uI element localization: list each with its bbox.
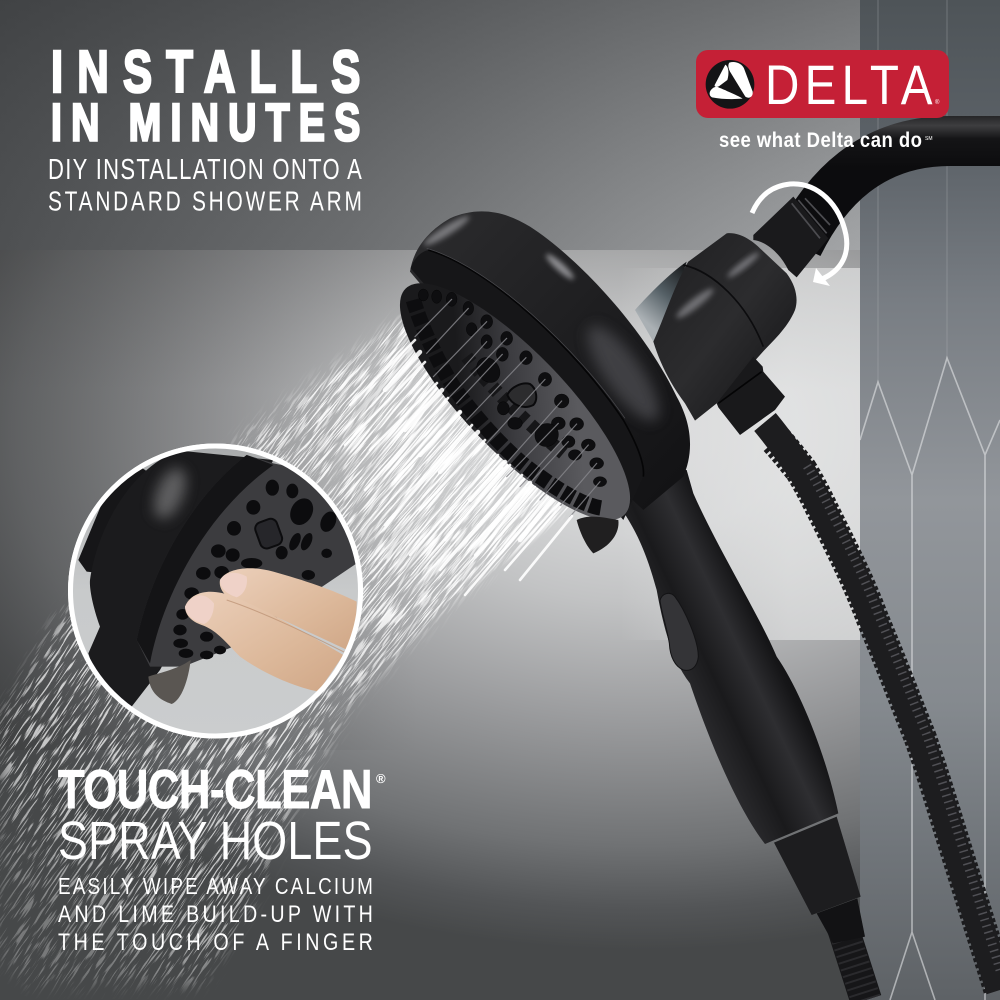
Delta logo	[696, 50, 949, 152]
inset centre nozzle	[253, 517, 284, 550]
heading: touch-clean spray holes: SPRAY HOLES	[58, 810, 373, 871]
heading: installs in minutes	[51, 39, 360, 152]
head back dome	[410, 211, 690, 510]
touch-clean description: EASILY WIPE AWAY CALCIUM	[58, 874, 373, 899]
logo emblem	[706, 60, 754, 109]
right tile panel with chevrons	[860, 0, 1000, 1000]
installs description	[48, 154, 363, 217]
inset head dome	[88, 450, 273, 707]
touch-clean description: AND LIME BUILD-UP WITH	[58, 900, 373, 927]
head rim band	[411, 250, 644, 520]
tagline: see what Delta can do	[719, 129, 922, 152]
two fingers	[185, 568, 357, 692]
inset tab	[148, 660, 191, 704]
inset face	[137, 455, 357, 667]
mirror reflection sliver	[635, 262, 687, 342]
hose nut	[717, 357, 785, 435]
holder mount	[635, 197, 830, 435]
thin jets across the face	[415, 299, 600, 517]
rotation arrow	[752, 184, 847, 286]
shower arm pipe	[798, 141, 1000, 245]
bright water jets near head	[345, 340, 572, 595]
fingernails	[220, 573, 247, 597]
heading: installs in minutes: INSTALLS	[51, 39, 360, 105]
registered mark: ®	[376, 771, 386, 786]
handle grip	[620, 470, 838, 844]
logo red badge	[696, 50, 949, 118]
touch-clean description: THE TOUCH OF A FINGER	[58, 928, 373, 955]
handle	[620, 470, 865, 943]
service mark: SM	[925, 136, 932, 142]
logo wordmark: DELTA	[765, 54, 933, 117]
heading: touch-clean spray holes: TOUCH-CLEAN	[58, 758, 372, 820]
heading: touch-clean spray holes	[58, 758, 386, 871]
heading: installs in minutes: IN MINUTES	[51, 93, 360, 152]
inset detail circle	[68, 444, 363, 739]
water spray	[0, 314, 570, 994]
handle trigger button	[660, 593, 698, 670]
inset mount arm	[78, 468, 146, 572]
registered mark: ®	[935, 99, 940, 106]
handle lower sleeve	[774, 817, 861, 915]
mount body	[653, 233, 797, 421]
dark nozzle cluster along lower edge	[413, 300, 603, 508]
shower head	[370, 211, 690, 553]
threaded collar	[753, 197, 828, 277]
trigger tab	[577, 517, 619, 553]
installs description: STANDARD SHOWER ARM	[48, 187, 362, 217]
installs description: DIY INSTALLATION ONTO A	[48, 154, 363, 186]
centre nozzle	[507, 383, 536, 407]
spray holes	[418, 289, 607, 487]
flexible hose	[765, 422, 1000, 1000]
touch-clean description	[58, 874, 373, 955]
spray face	[370, 254, 660, 550]
dome highlights	[422, 213, 671, 430]
inset spray holes	[173, 480, 339, 659]
